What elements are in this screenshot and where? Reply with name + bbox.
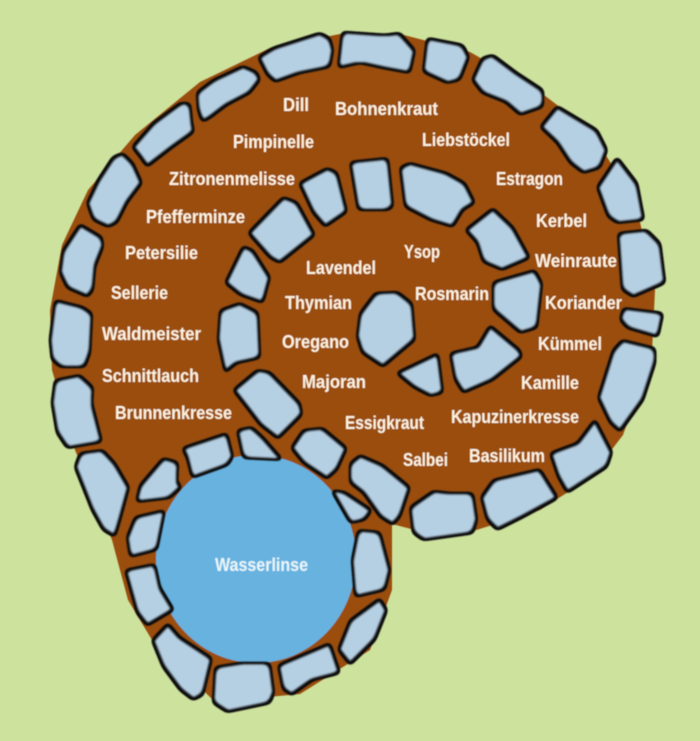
herb labels: Essigkraut [345, 413, 424, 433]
herb labels: Liebstöckel [422, 130, 510, 150]
soil spiral [50, 34, 655, 702]
herb labels: Kapuzinerkresse [451, 407, 579, 427]
herb labels: Ysop [404, 242, 440, 262]
herb labels: Oregano [282, 332, 349, 352]
herb labels: Majoran [302, 372, 366, 392]
herb labels: Zitronenmelisse [169, 169, 295, 189]
herb labels: Koriander [545, 293, 622, 313]
herb labels: Dill [283, 95, 309, 115]
herb labels: Salbei [403, 450, 448, 470]
herb labels: Pimpinelle [233, 132, 314, 152]
herb labels: Rosmarin [415, 284, 489, 304]
herb labels: Waldmeister [102, 324, 201, 344]
herb labels: Estragon [496, 169, 563, 189]
herb labels: Kümmel [538, 334, 602, 354]
herb labels: Basilikum [469, 446, 545, 466]
herb labels: Brunnenkresse [115, 403, 232, 423]
herb labels: Kerbel [536, 211, 587, 231]
herb labels: Thymian [285, 293, 352, 313]
pond [156, 455, 356, 663]
herb labels: Petersilie [125, 243, 198, 263]
herb labels: Pfefferminze [146, 207, 245, 227]
herb labels: Kamille [521, 373, 579, 393]
herb labels: Lavendel [306, 258, 376, 278]
herb labels: Bohnenkraut [335, 99, 438, 119]
herb labels: Schnittlauch [102, 366, 199, 386]
herb labels: Sellerie [111, 283, 168, 303]
herb labels [102, 95, 622, 575]
herb labels: Wasserlinse [215, 555, 308, 575]
herb labels: Weinraute [535, 251, 617, 271]
inner stone ring [218, 158, 542, 439]
